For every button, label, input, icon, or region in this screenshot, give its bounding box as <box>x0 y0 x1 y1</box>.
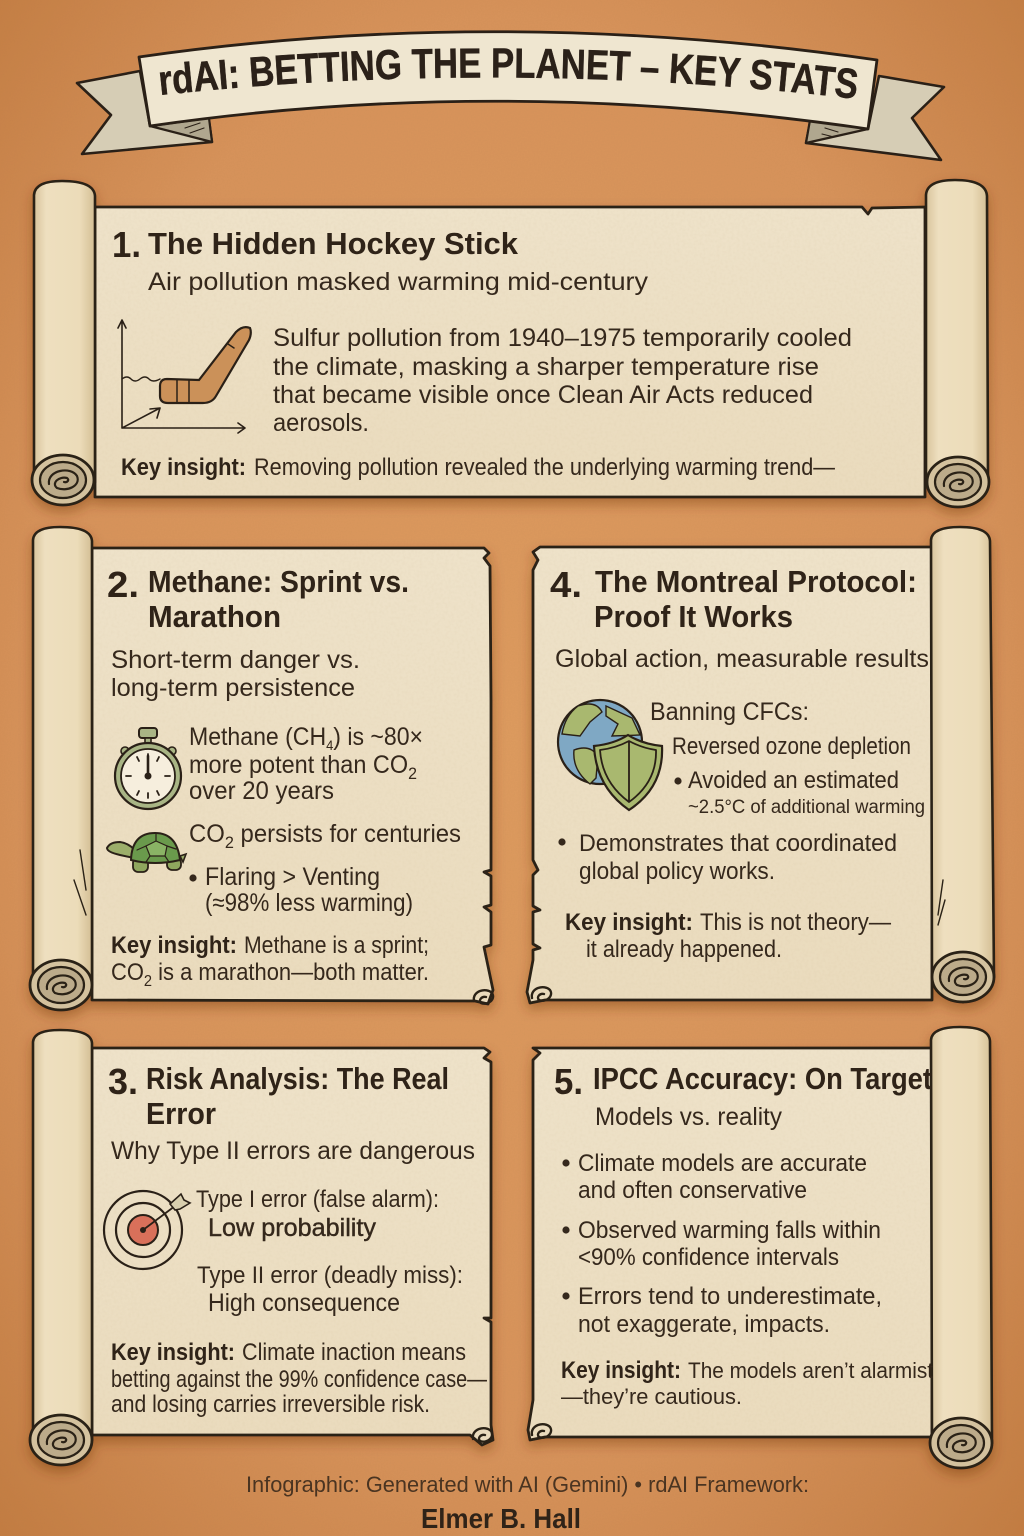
bullet: errors underestimate <box>562 1283 882 1338</box>
bullet: observed warming: Observed warming falls within <box>578 1217 881 1244</box>
key insight: Removing pollution revealed the underlying warming trend— <box>254 454 835 481</box>
body text: aerosols. <box>273 409 369 437</box>
ozone text <box>650 698 925 818</box>
co2 and flaring text: persists for centuries <box>234 820 461 848</box>
ozone text: Banning CFCs: <box>650 698 809 726</box>
icon: target with arrow <box>104 1191 190 1269</box>
error types text: High consequence <box>208 1289 400 1317</box>
heading: 3. <box>108 1061 138 1102</box>
key insight: Key insight: <box>121 454 246 481</box>
subtitle: long-term persistence <box>111 674 355 702</box>
body text: that became visible once Clean Air Acts reduced <box>273 381 813 409</box>
key insight: CO <box>111 959 147 986</box>
footer credit: Infographic: Generated with AI (Gemini) • rdAI Framework: <box>246 1472 809 1497</box>
icon: turtle <box>107 833 186 872</box>
bullet: errors underestimate: not exaggerate, impacts. <box>578 1311 830 1338</box>
heading <box>107 564 409 634</box>
key insight: Key insight: <box>111 1339 235 1366</box>
bullet: observed warming <box>562 1217 881 1271</box>
bullet: models accurate <box>562 1150 867 1204</box>
co2 and flaring text: CO <box>189 820 226 848</box>
ozone text: ~2.5°C of additional warming <box>688 797 925 818</box>
key insight: Key insight: <box>111 932 237 959</box>
co2 and flaring text: (≈98% less warming) <box>205 889 413 917</box>
key insight: Key insight: <box>565 909 693 936</box>
heading: 2. <box>107 564 139 605</box>
co2 and flaring text: Flaring > Venting <box>205 863 380 891</box>
subtitle: Global action, measurable results <box>555 645 929 673</box>
heading: 1. <box>112 224 141 265</box>
ozone text: Avoided an estimated <box>688 767 899 794</box>
bullet: coordinated policy: global policy works. <box>579 858 775 885</box>
key insight: The models aren’t alarmist <box>688 1358 933 1383</box>
bullet: models accurate: and often conservative <box>578 1177 807 1204</box>
methane text: 4 <box>326 737 333 753</box>
heading: Methane: Sprint vs. <box>148 564 409 599</box>
error types text: Low probability <box>208 1214 376 1242</box>
bullet: observed warming: <90% confidence intervals <box>578 1244 839 1271</box>
methane text: more potent than CO <box>189 751 422 779</box>
methane text: over 20 years <box>189 777 334 805</box>
heading <box>108 1061 449 1131</box>
subtitle: Models vs. reality <box>595 1103 782 1131</box>
key insight <box>561 1357 933 1409</box>
key insight <box>111 1339 487 1418</box>
error types text <box>196 1186 463 1317</box>
key insight: it already happened. <box>586 936 782 963</box>
footer credit <box>246 1472 809 1534</box>
key insight: betting against the 99% confidence case— <box>111 1366 487 1393</box>
heading <box>554 1061 932 1102</box>
heading: The Hidden Hockey Stick <box>148 226 519 261</box>
key insight: is a marathon—both matter. <box>152 959 429 986</box>
key insight: This is not theory— <box>700 909 891 936</box>
key insight: —they’re cautious. <box>561 1384 742 1409</box>
heading: Risk Analysis: The Real <box>146 1061 449 1096</box>
title banner <box>76 30 946 162</box>
heading: The Montreal Protocol: <box>595 564 917 599</box>
key insight <box>111 932 429 990</box>
icon: hockey stick chart <box>118 320 251 433</box>
error types text: Type I error (false alarm): <box>196 1186 439 1213</box>
panel 2: Methane <box>30 527 493 1010</box>
methane text <box>189 723 423 805</box>
bullet: coordinated policy <box>558 830 897 885</box>
key insight: and losing carries irreversible risk. <box>111 1391 430 1418</box>
co2 and flaring text <box>189 820 461 917</box>
subtitle <box>111 646 360 702</box>
heading: Proof It Works <box>594 599 793 634</box>
subtitle: Short-term danger vs. <box>111 646 360 674</box>
body text: Sulfur pollution from 1940–1975 temporarily cooled <box>273 324 852 352</box>
key insight: Climate inaction means <box>242 1339 466 1366</box>
methane text: Methane (CH <box>189 723 338 751</box>
bullet: errors underestimate: Errors tend to underestimate, <box>578 1283 882 1310</box>
title banner: rdAI: BETTING THE PLANET – KEY STATS <box>160 48 858 98</box>
heading <box>550 564 917 634</box>
heading: IPCC Accuracy: On Target <box>593 1061 932 1096</box>
heading: Error <box>146 1096 216 1131</box>
key insight <box>565 909 891 963</box>
bullet: models accurate: Climate models are accurate <box>578 1150 867 1177</box>
heading: 5. <box>554 1061 583 1102</box>
key insight: 2 <box>144 973 152 990</box>
key insight: Key insight: <box>561 1357 681 1384</box>
subtitle: Why Type II errors are dangerous <box>111 1137 475 1165</box>
co2 and flaring text: 2 <box>225 833 234 852</box>
methane text: ) is ~80× <box>333 723 423 751</box>
icon: stopwatch <box>115 728 181 809</box>
panel 4: Montreal Protocol <box>527 527 994 1003</box>
icon: globe and shield <box>558 700 662 810</box>
heading: 4. <box>550 564 582 605</box>
heading: Marathon <box>148 599 281 634</box>
panel 3: Risk Analysis <box>30 1030 493 1465</box>
subtitle: Air pollution masked warming mid-century <box>148 268 649 296</box>
panel 1: The Hidden Hockey Stick <box>32 180 989 507</box>
key insight: Methane is a sprint; <box>244 932 429 959</box>
body text: the climate, masking a sharper temperature rise <box>273 353 819 381</box>
body text <box>273 324 852 437</box>
panel 5: IPCC Accuracy <box>528 1027 992 1468</box>
methane text: 2 <box>408 764 417 783</box>
ozone text: Reversed ozone depletion <box>672 733 911 760</box>
bullet: coordinated policy: Demonstrates that coordinated <box>579 830 897 857</box>
error types text: Type II error (deadly miss): <box>197 1262 463 1289</box>
footer credit: Elmer B. Hall <box>421 1503 581 1534</box>
